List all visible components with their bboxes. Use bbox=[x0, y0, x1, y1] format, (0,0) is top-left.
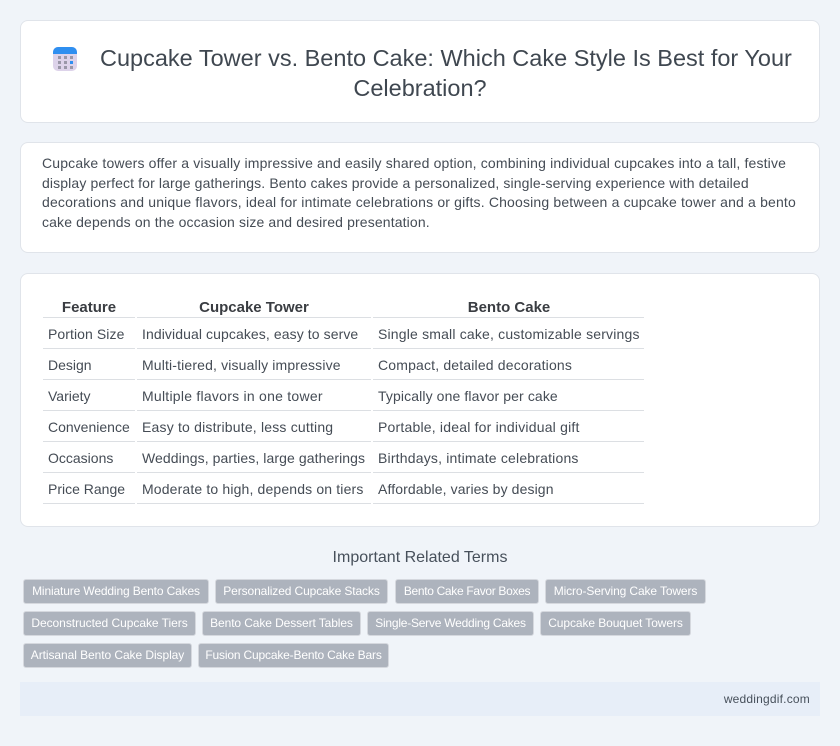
row: convenience: Convenience bbox=[48, 419, 130, 435]
footer source: weddingdif.com bbox=[724, 692, 810, 706]
table header: Bento Cake bbox=[468, 299, 550, 316]
row: occasions bbox=[48, 450, 579, 466]
related term tags: Bento Cake Dessert Tables bbox=[210, 616, 353, 630]
row: convenience bbox=[48, 419, 580, 435]
row: occasions: Birthdays, intimate celebrations bbox=[378, 450, 579, 466]
title: Celebration? bbox=[353, 75, 487, 101]
related term tags: Micro-Serving Cake Towers bbox=[554, 584, 697, 598]
row: design: Compact, detailed decorations bbox=[378, 357, 572, 373]
row: portion size: Single small cake, customizable servings bbox=[378, 326, 640, 342]
heading: related terms: Important Related Terms bbox=[333, 549, 507, 566]
footer bbox=[20, 682, 820, 716]
row: portion size: Portion Size bbox=[48, 326, 124, 342]
panel: title header bbox=[20, 20, 820, 123]
title bbox=[100, 45, 792, 101]
intro paragraph: decorations and unique flavors, ideal for intimate celebrations or gifts. Choosing between a cupcake tower and a bento bbox=[42, 194, 796, 210]
related term tags: Fusion Cupcake-Bento Cake Bars bbox=[205, 648, 382, 662]
related term tags: Personalized Cupcake Stacks bbox=[223, 584, 380, 598]
panel: intro text bbox=[20, 142, 820, 253]
icon: calendar bbox=[53, 47, 77, 71]
row: variety: Typically one flavor per cake bbox=[378, 388, 558, 404]
intro paragraph: display perfect for large gatherings. Bento cakes provide a personalized, single-serving experience with detailed bbox=[42, 175, 749, 191]
table header: Feature bbox=[62, 299, 116, 316]
row: price range bbox=[48, 481, 554, 497]
row: price range: Affordable, varies by design bbox=[378, 481, 554, 497]
related term tags: Deconstructed Cupcake Tiers bbox=[31, 616, 188, 630]
row: design: Design bbox=[48, 357, 92, 373]
row: variety: Multiple flavors in one tower bbox=[142, 388, 323, 404]
intro paragraph: cake depends on the occasion size and desired presentation. bbox=[42, 214, 430, 230]
row: design bbox=[48, 357, 572, 373]
panel: comparison table bbox=[20, 273, 820, 527]
related term tags: Bento Cake Favor Boxes bbox=[404, 584, 530, 598]
related term tags: Miniature Wedding Bento Cakes bbox=[32, 584, 200, 598]
related term tags: Single-Serve Wedding Cakes bbox=[375, 616, 526, 630]
title: Cupcake Tower vs. Bento Cake: Which Cake Style Is Best for Your bbox=[100, 45, 792, 71]
row: price range: Price Range bbox=[48, 481, 125, 497]
table header: Cupcake Tower bbox=[199, 299, 309, 316]
intro paragraph bbox=[42, 155, 796, 230]
row: variety bbox=[48, 388, 558, 404]
table header bbox=[62, 299, 550, 316]
row: design: Multi-tiered, visually impressive bbox=[142, 357, 341, 373]
row: portion size bbox=[48, 326, 640, 342]
intro paragraph: Cupcake towers offer a visually impressive and easily shared option, combining individual cupcakes into a tall, festive bbox=[42, 155, 786, 171]
related term tags: Cupcake Bouquet Towers bbox=[548, 616, 683, 630]
row: convenience: Portable, ideal for individual gift bbox=[378, 419, 580, 435]
row: variety: Variety bbox=[48, 388, 91, 404]
row: occasions: Weddings, parties, large gatherings bbox=[142, 450, 365, 466]
related term tags: Artisanal Bento Cake Display bbox=[31, 648, 184, 662]
related term tags bbox=[23, 579, 706, 668]
row: price range: Moderate to high, depends on tiers bbox=[142, 481, 363, 497]
row: occasions: Occasions bbox=[48, 450, 113, 466]
row: convenience: Easy to distribute, less cutting bbox=[142, 419, 333, 435]
row: portion size: Individual cupcakes, easy to serve bbox=[142, 326, 358, 342]
